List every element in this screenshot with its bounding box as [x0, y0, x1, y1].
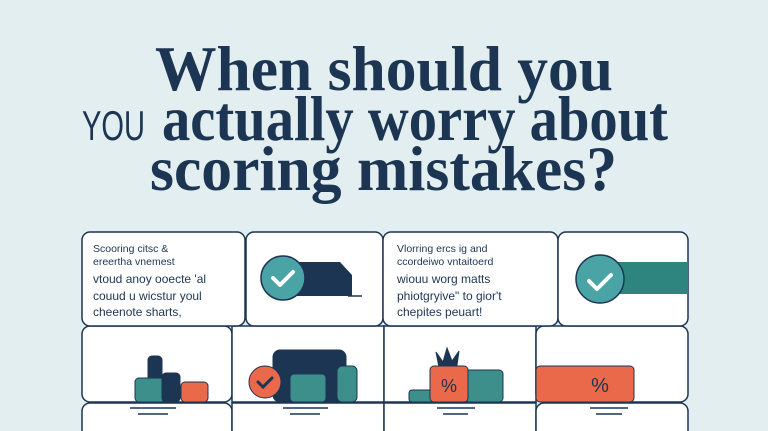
text block: left: Scooring citsc &	[93, 243, 168, 255]
title	[82, 33, 669, 204]
title: YOU	[82, 102, 145, 149]
icon: percent bar: %	[591, 375, 609, 397]
text block: right: chepites peuart!	[397, 305, 482, 319]
icon: sofa with check	[249, 350, 357, 414]
text block: left: vtoud anoy ooecte 'al	[93, 272, 206, 286]
text block: right: phiotgryive" to gior't	[397, 289, 502, 303]
icon: check with bar	[576, 255, 688, 303]
text block: left: ereertha vnemest	[93, 256, 175, 268]
icon: percent with crown	[409, 348, 503, 414]
chart: bars	[130, 356, 208, 414]
grid panel	[82, 232, 688, 431]
title: scoring mistakes?	[150, 133, 617, 204]
text block: left: cheenote sharts,	[93, 305, 182, 319]
icon: percent with crown: %	[441, 376, 457, 396]
title: When should you	[155, 33, 613, 104]
text block: left: couud u wicstur youl	[93, 289, 202, 303]
text block: right	[396, 243, 502, 319]
icon: check with block	[261, 256, 362, 300]
text block: right: Vlorring ercs ig and	[397, 243, 488, 255]
text block: left	[93, 243, 206, 319]
title: actually worry about	[162, 83, 669, 154]
text block: right: wiouu worg matts	[396, 272, 490, 286]
icon: percent bar	[536, 366, 634, 414]
text block: right: ccordeiwo vntaitoerd	[397, 256, 493, 268]
